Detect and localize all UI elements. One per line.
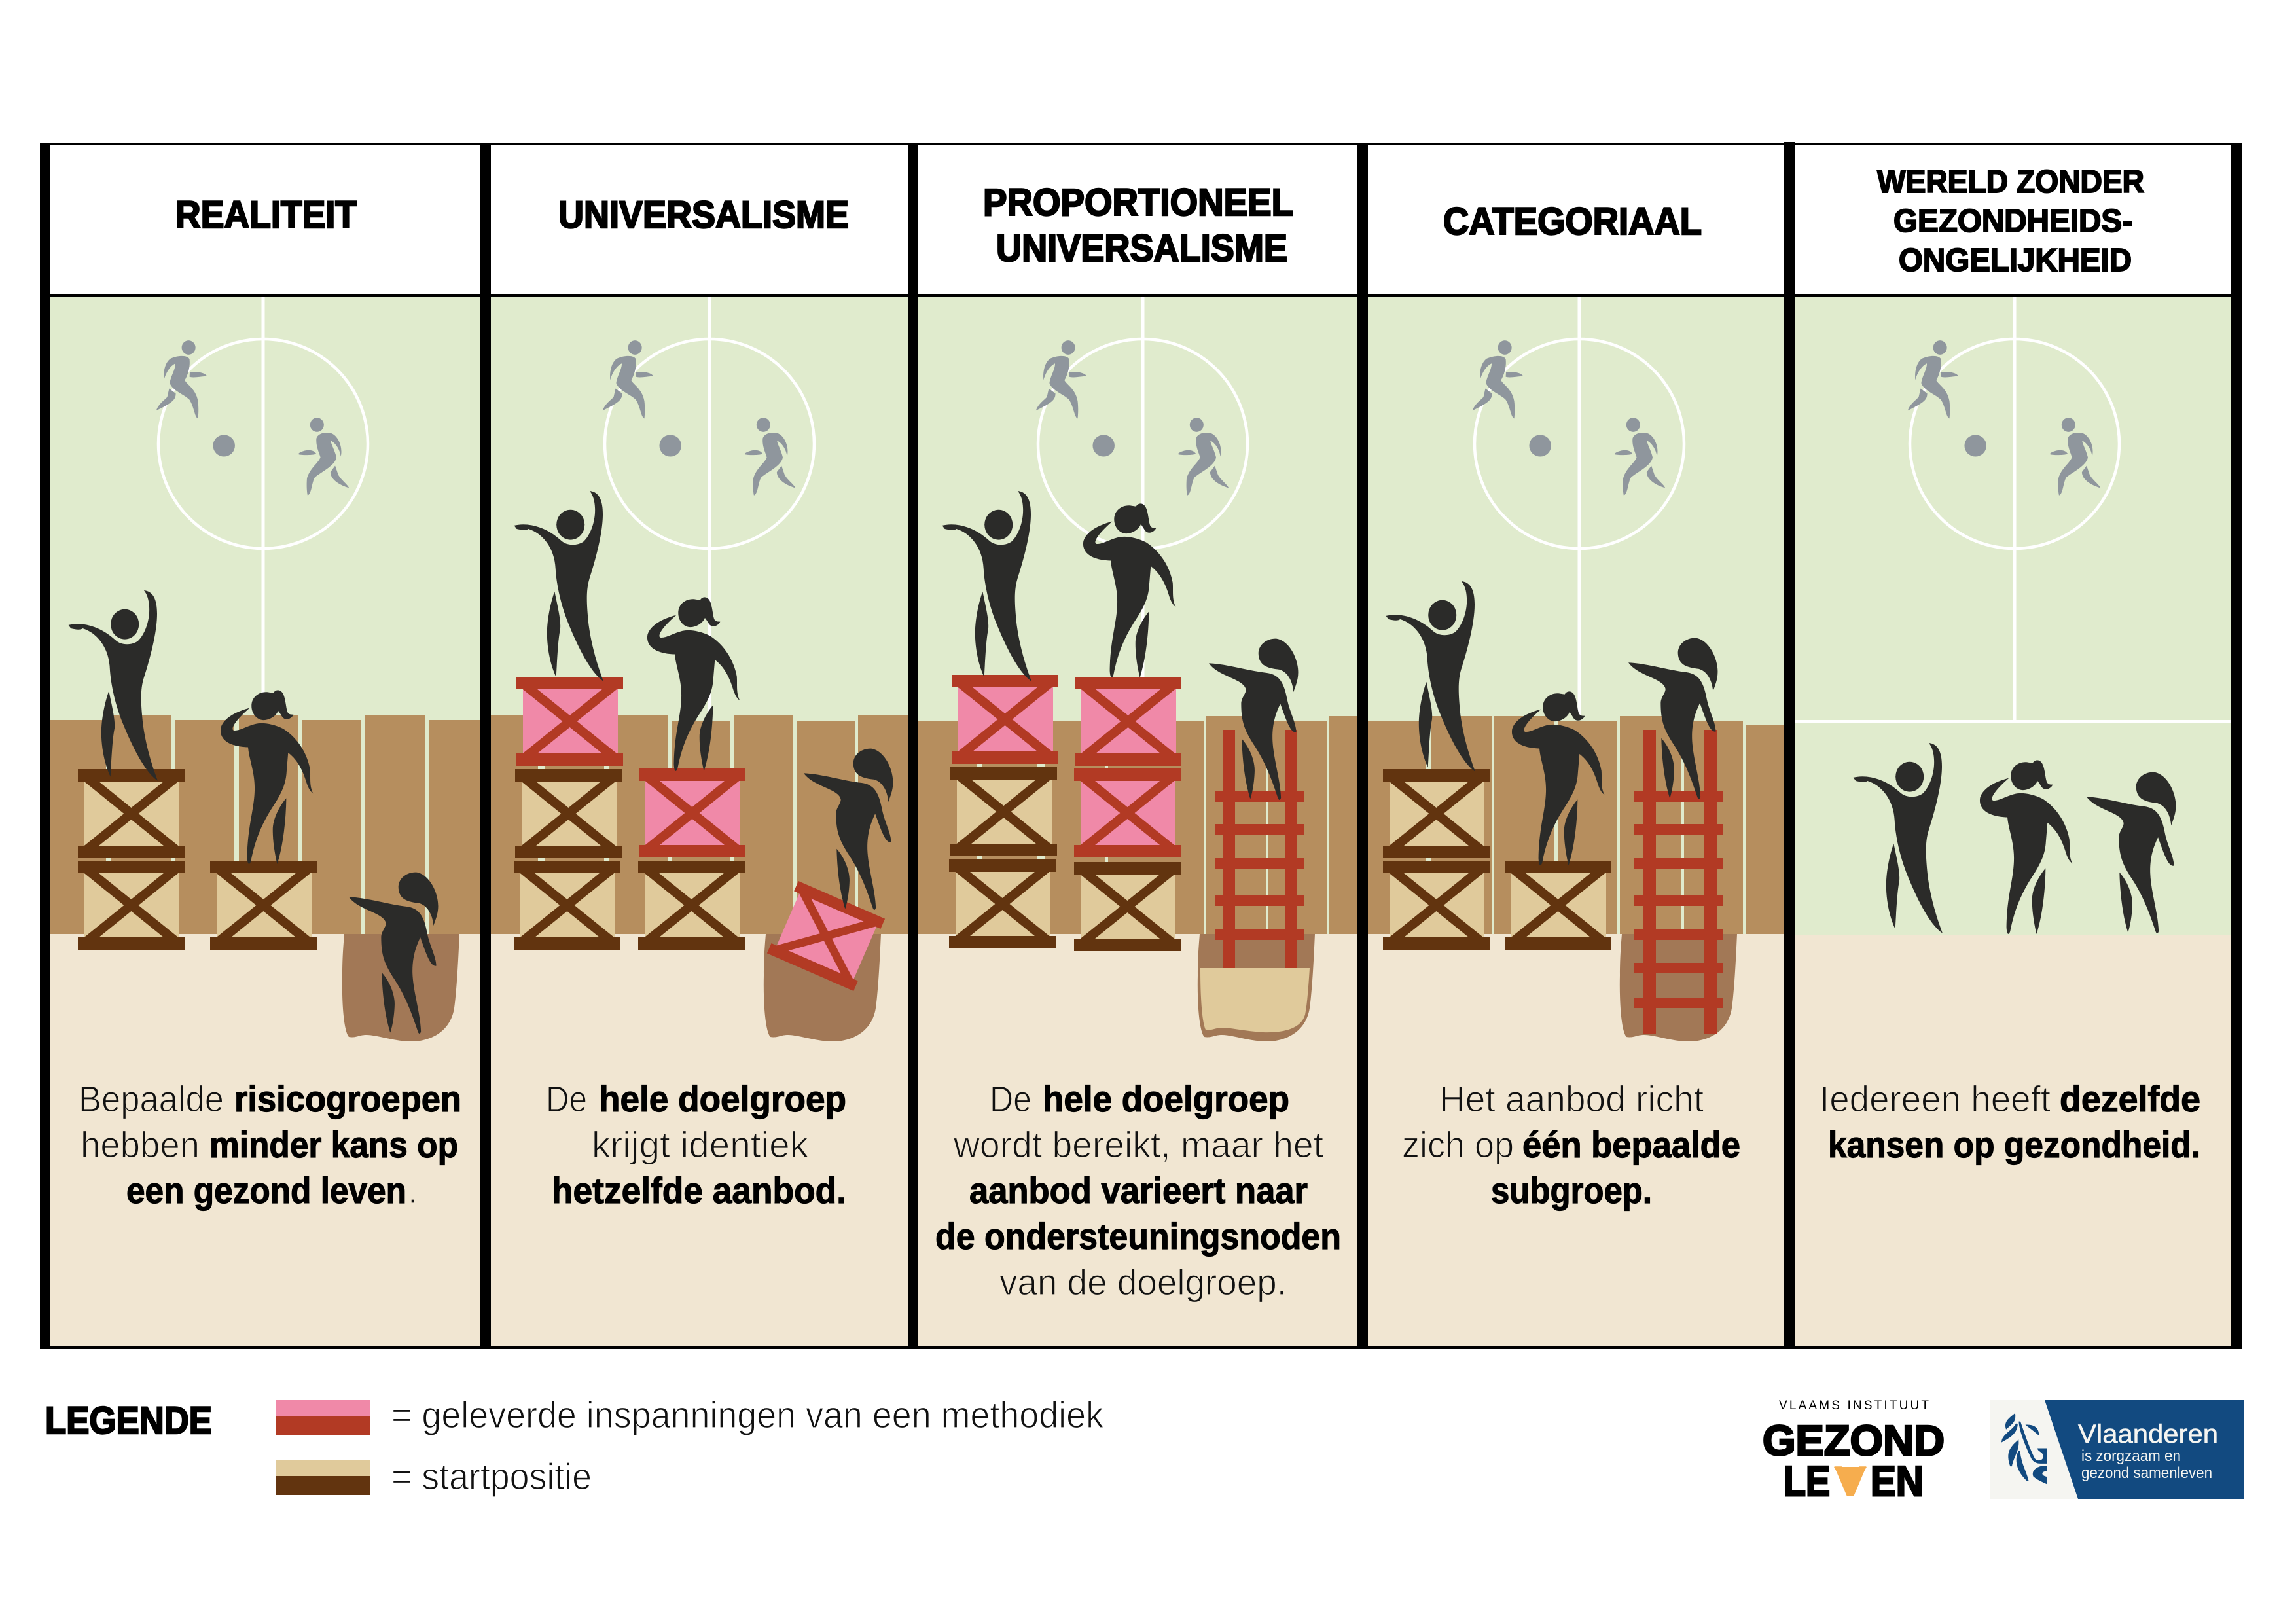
fence: [50, 715, 480, 934]
figure middle: [1083, 503, 1176, 677]
heading: proportioneel universalisme: UNIVERSALISME: [996, 227, 1287, 270]
figure middle: [1980, 760, 2073, 934]
pit: [764, 934, 881, 1041]
heading: wereld zonder gezondheidsongelijkheid: [1877, 164, 2144, 278]
figure on tilted crate: [804, 749, 893, 910]
logo: vlaanderen: [1990, 1400, 2244, 1499]
heading: wereld zonder gezondheidsongelijkheid: WERELD ZONDER: [1877, 164, 2144, 200]
figure tall: [1854, 743, 1943, 933]
text: wereld description: [1820, 1078, 2200, 1165]
text: realiteit description: hebben: [81, 1124, 200, 1165]
text: categoriaal description: één bepaalde: [1522, 1124, 1740, 1165]
text: realiteit description: [79, 1078, 461, 1211]
figure middle: [1512, 691, 1605, 865]
text: categoriaal description: [1402, 1078, 1740, 1211]
fence: [918, 716, 1357, 934]
text: categoriaal description: subgroep.: [1491, 1170, 1652, 1211]
crate stack: [1383, 769, 1490, 950]
text: realiteit description: minder kans op: [209, 1124, 458, 1165]
heading: proportioneel universalisme: [983, 181, 1293, 270]
pitch with runners: [156, 297, 368, 720]
fence: [491, 715, 908, 934]
text: universalisme description: hele doelgroep: [599, 1078, 846, 1119]
logo: vlaams instituut gezond leven: GEZOND: [1763, 1416, 1945, 1464]
figure right: [2087, 772, 2176, 933]
logo: vlaams instituut gezond leven: VLAAMS INSTITUUT: [1779, 1399, 1929, 1413]
logo: vlaanderen: is zorgzaam en: [2081, 1447, 2181, 1465]
pit: [1620, 934, 1737, 1041]
text: proportioneel description: [935, 1078, 1341, 1303]
logo: vlaanderen: Vlaanderen: [2078, 1420, 2218, 1449]
text: categoriaal description: zich op: [1402, 1124, 1514, 1165]
legend label: startpositie: = startpositie: [391, 1456, 592, 1498]
panel: categoriaal: [1368, 200, 1784, 1347]
tilted crate: [767, 881, 885, 991]
crate stack: [638, 768, 745, 950]
text: proportioneel description: wordt bereikt, maar het: [953, 1124, 1323, 1165]
text: proportioneel description: hele doelgroep: [1043, 1078, 1289, 1119]
text: proportioneel description: De: [990, 1078, 1031, 1119]
logo: vlaams instituut gezond leven: [1763, 1399, 1945, 1505]
text: proportioneel description: de ondersteuningsnoden: [935, 1216, 1341, 1257]
legend swatch: methodiek: [276, 1400, 370, 1435]
crate stack: [949, 675, 1058, 948]
table frame: [40, 142, 2242, 1349]
crate: [210, 861, 317, 950]
text: universalisme description: [546, 1078, 846, 1211]
logo: vlaanderen: gezond samenleven: [2081, 1464, 2212, 1482]
crate stack: [78, 769, 185, 950]
pitch with runners: [603, 297, 814, 720]
figure tall: [942, 491, 1031, 681]
fence: [1368, 716, 1784, 934]
text: realiteit description: een gezond leven: [126, 1170, 406, 1211]
pit: [342, 934, 459, 1041]
heading: realiteit: REALITEIT: [175, 194, 357, 236]
text: realiteit description: .: [408, 1170, 418, 1211]
heading: universalisme: UNIVERSALISME: [558, 194, 849, 236]
text: realiteit description: risicogroepen: [234, 1078, 461, 1119]
text: universalisme description: hetzelfde aanbod.: [552, 1170, 846, 1211]
heading: proportioneel universalisme: PROPORTIONEEL: [983, 181, 1293, 224]
figure middle: [647, 597, 740, 771]
figure in pit: [349, 873, 438, 1034]
legend title: LEGENDE: [45, 1399, 212, 1442]
ladder: [1215, 730, 1304, 968]
text: realiteit description: Bepaalde: [79, 1078, 224, 1119]
text: proportioneel description: van de doelgroep.: [999, 1261, 1287, 1303]
figure tall: [1386, 581, 1475, 772]
panel: wereld zonder gezondheidsongelijkheid: [1795, 164, 2231, 1347]
crate stack: [514, 677, 623, 950]
heading: wereld zonder gezondheidsongelijkheid: GEZONDHEIDS-: [1893, 203, 2132, 239]
panel: universalisme: [491, 194, 908, 1347]
text: categoriaal description: Het aanbod richt: [1439, 1078, 1704, 1119]
pitch with runners: [1908, 297, 2119, 720]
figure tall: [69, 590, 158, 781]
text: wereld description: Iedereen heeft: [1820, 1078, 2051, 1119]
legend swatch: startpositie: [276, 1460, 370, 1495]
crate stack: [1074, 677, 1181, 951]
panel: proportioneel universalisme: [918, 181, 1357, 1347]
logo: vlaams instituut gezond leven: V: [1834, 1457, 1867, 1505]
heading: wereld zonder gezondheidsongelijkheid: ONGELIJKHEID: [1899, 242, 2132, 278]
legend label: methodiek: = geleverde inspanningen van een methodiek: [391, 1394, 1103, 1436]
text: proportioneel description: aanbod varieert naar: [969, 1170, 1308, 1211]
figure tall: [514, 491, 603, 681]
pit with fill: [1198, 934, 1315, 1041]
legend: [45, 1394, 1103, 1498]
text: wereld description: kansen op gezondheid.: [1828, 1124, 2200, 1165]
crate: [1505, 861, 1611, 950]
ladder: [1634, 730, 1723, 1034]
figure on ladder: [1209, 639, 1298, 800]
logo: vlaams instituut gezond leven: EN: [1871, 1457, 1924, 1505]
text: wereld description: dezelfde: [2060, 1078, 2200, 1119]
pitch with runners: [1473, 297, 1684, 720]
pitch with runners: [1036, 297, 1247, 720]
icon: flemish lion: [2003, 1415, 2046, 1483]
heading: categoriaal: CATEGORIAAL: [1443, 200, 1702, 243]
figure on ladder: [1628, 638, 1717, 799]
text: universalisme description: De: [546, 1078, 587, 1119]
text: universalisme description: krijgt identiek: [592, 1124, 809, 1165]
panel: realiteit: [50, 194, 480, 1347]
logo: vlaams instituut gezond leven: LE: [1784, 1457, 1830, 1505]
figure middle: [221, 690, 314, 864]
